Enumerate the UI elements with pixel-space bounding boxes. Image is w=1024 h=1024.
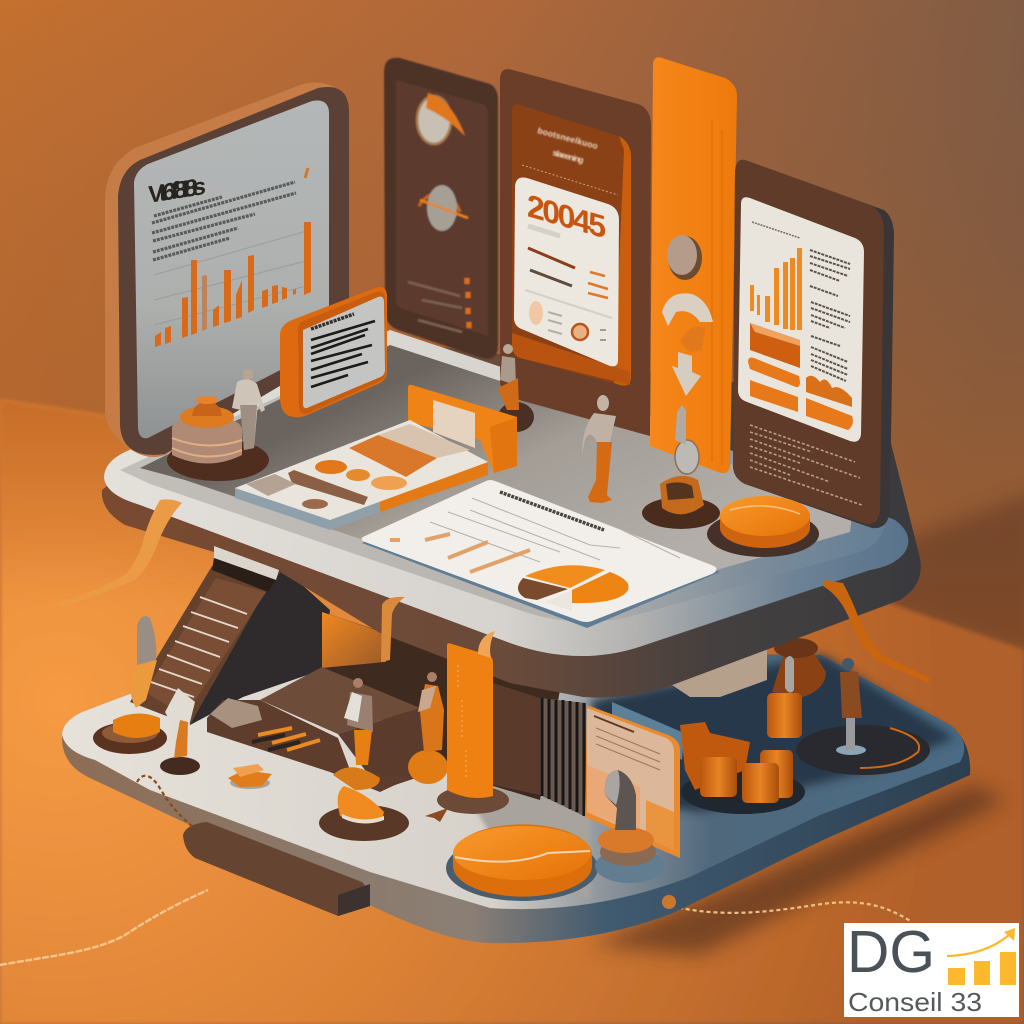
figure in front of tray [333, 678, 380, 790]
stairs [130, 546, 282, 725]
orange blocks [750, 323, 800, 368]
tablet pills [315, 460, 347, 474]
top platform [102, 330, 921, 698]
pie chart [518, 565, 629, 611]
logo bars [948, 952, 1016, 985]
orange room wall [322, 612, 385, 668]
year: 20045 [527, 187, 606, 246]
report title: slaeening [551, 147, 585, 165]
logo arrow [947, 928, 1015, 956]
screen bar chart [155, 222, 311, 347]
report title [536, 125, 599, 165]
orange column [437, 631, 509, 814]
figure on right dish [796, 658, 930, 775]
panel footnote [750, 425, 862, 505]
screen title: Vt6f8I8s [148, 173, 206, 209]
ribbon centre A [381, 597, 405, 662]
curved arrow [662, 293, 713, 352]
figure in orange trousers [582, 395, 616, 503]
stack on left dish [167, 396, 269, 481]
ribbon right [823, 580, 930, 683]
logo name: Conseil 33 [848, 987, 982, 1017]
logo letters: DG [847, 919, 935, 985]
small orange stack [228, 764, 272, 789]
wire: lower left [137, 776, 193, 827]
dark wedge under stairs [190, 565, 330, 725]
strap [382, 610, 386, 662]
bar chart [750, 248, 802, 330]
paper with pie chart [362, 480, 720, 628]
report title: bootsneelkuoo [536, 125, 599, 151]
big orange disc [446, 824, 598, 901]
panel: gauges [384, 58, 498, 359]
small arrow marker [425, 808, 448, 822]
coin stacks [680, 656, 805, 814]
lower interior under top platform [190, 565, 684, 858]
dish with ornament [319, 786, 409, 841]
small document card [280, 287, 387, 417]
paper lines [500, 492, 604, 530]
brown wall by column [493, 683, 540, 795]
gauge top [417, 93, 465, 144]
screen text [152, 182, 296, 260]
ribbon left [60, 499, 182, 606]
bullet statue [595, 770, 665, 883]
tray with keys [207, 698, 410, 792]
inner tablet [349, 435, 437, 477]
back cream box and cone [672, 638, 826, 698]
room floor [260, 667, 420, 734]
gauge bottom [419, 185, 468, 231]
striped pillar [540, 698, 586, 817]
chart description [810, 250, 850, 381]
lower-left figures on orange base [93, 616, 167, 754]
lower platform [62, 650, 970, 943]
logo [844, 919, 1019, 1017]
panel: year report [500, 69, 651, 436]
panel: data sheet [733, 160, 894, 528]
orange disc on dish [707, 496, 819, 557]
room back wall [322, 612, 560, 800]
central tablet [235, 385, 517, 530]
wire: bottom left [0, 890, 208, 965]
figure at left dish [232, 368, 265, 450]
statue on dish [642, 405, 720, 529]
knob [667, 235, 702, 280]
wire clip [662, 895, 676, 909]
orange document card [585, 702, 684, 858]
down arrow [672, 352, 701, 396]
panel: orange pillar [650, 57, 737, 473]
orange figure near column [408, 672, 448, 784]
front handle [183, 822, 370, 916]
figure on back dish [498, 344, 534, 432]
wire: bottom right [672, 902, 912, 922]
white figure on small dish [160, 688, 200, 775]
panel: left monitor [105, 83, 349, 457]
